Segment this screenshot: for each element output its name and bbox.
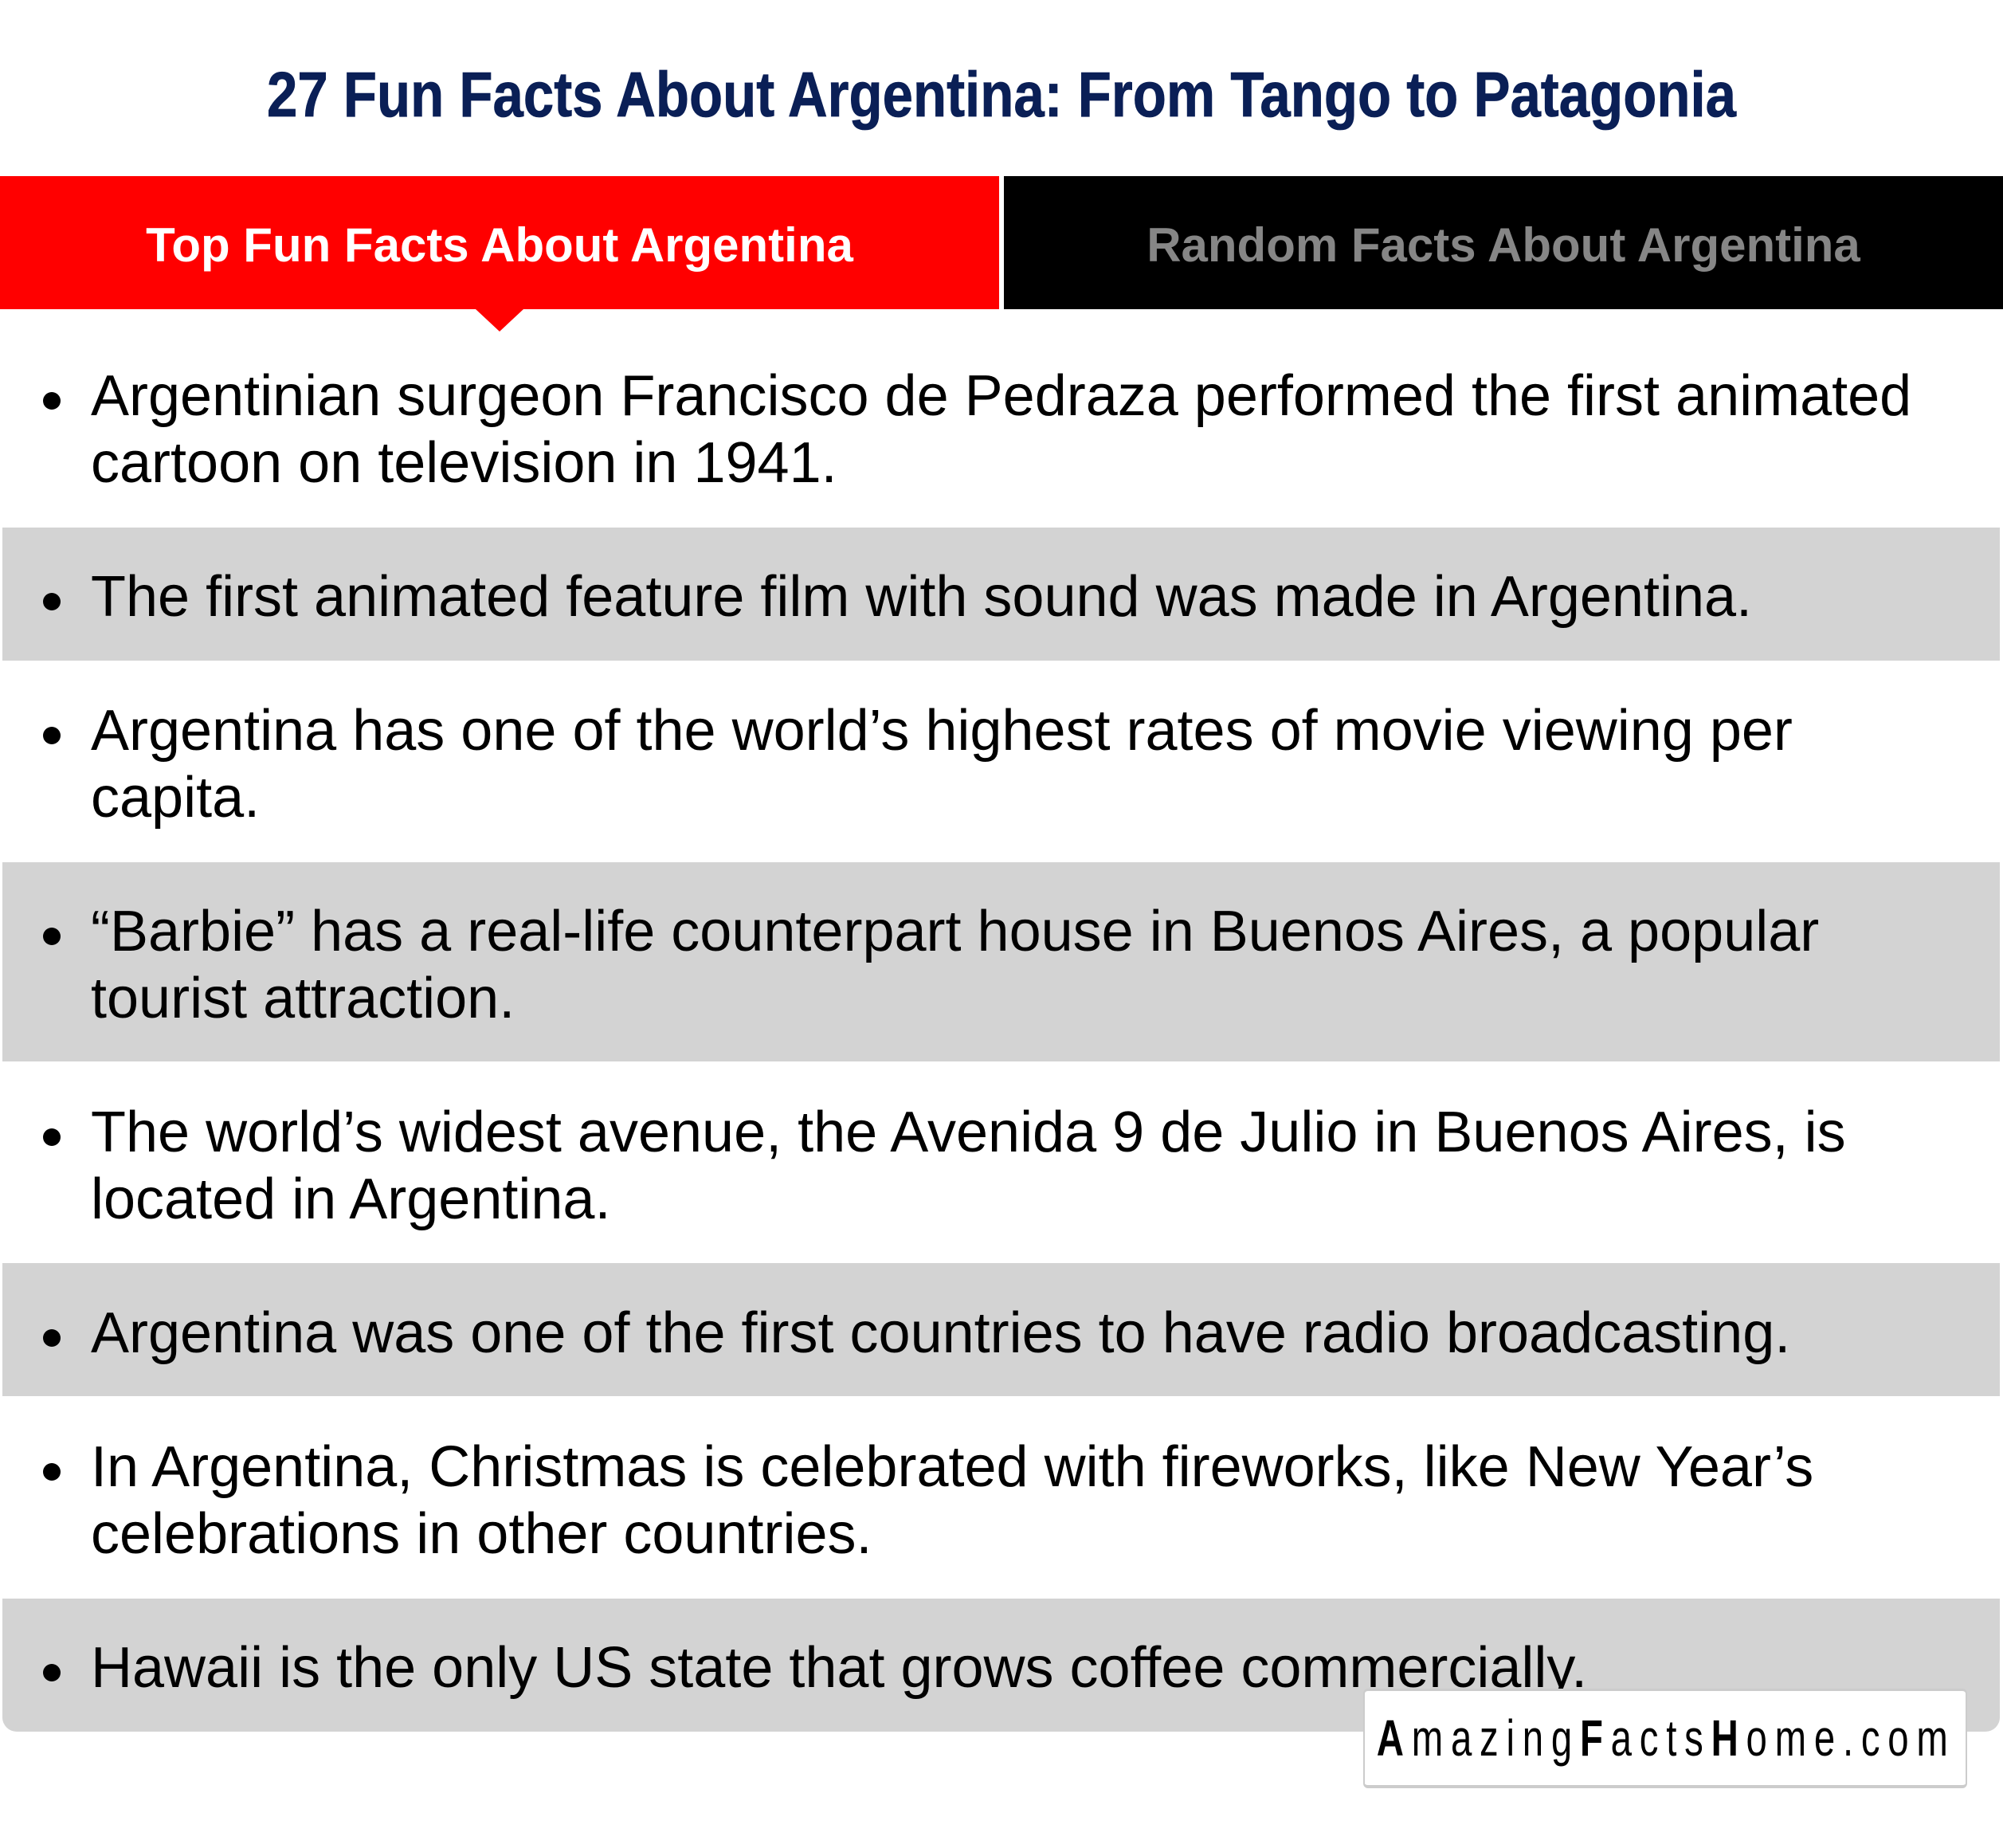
row background 2: [2, 528, 2000, 661]
fact 3: Argentina has one of the world’s highest rates of movie viewing per: [91, 699, 1793, 763]
fact 4: tourist attraction.: [91, 967, 515, 1030]
fact 7: celebrations in other countries.: [91, 1502, 872, 1566]
tab: random facts (inactive): Random Facts About Argentina: [1147, 218, 1860, 272]
fact 7: [43, 1435, 1813, 1566]
fact 2: The first animated feature film with sound was made in Argentina.: [91, 565, 1752, 629]
fact 1: [43, 364, 1911, 495]
fact 1: Argentinian surgeon Francisco de Pedraza performed the first animated: [91, 364, 1911, 428]
watermark text: AmazingFactsHome.com: [1377, 1709, 1948, 1767]
tab: random facts (inactive): [1004, 176, 2003, 309]
row background 4: [2, 862, 2000, 1061]
tab pointer arrow: [476, 309, 523, 332]
fact 4: “Barbie” has a real-life counterpart house in Buenos Aires, a popular: [91, 900, 1819, 963]
fact 5: The world’s widest avenue, the Avenida 9 de Julio in Buenos Aires, is: [91, 1101, 1846, 1164]
tab: top fun facts (active): Top Fun Facts About Argentina: [146, 218, 853, 272]
tab: top fun facts (active): [0, 176, 999, 309]
fact 5: located in Argentina.: [91, 1167, 610, 1231]
fact 3: [43, 699, 1793, 830]
fact 4: [43, 900, 1819, 1030]
fact 1: cartoon on television in 1941.: [91, 431, 837, 495]
fact 5: [43, 1101, 1846, 1231]
fact 8: Hawaii is the only US state that grows coffee commercially.: [91, 1636, 1587, 1700]
fact 6: Argentina was one of the first countries to have radio broadcasting.: [91, 1301, 1790, 1365]
row background 8: [2, 1599, 2000, 1732]
watermark badge: [1363, 1689, 1967, 1788]
fact 3: capita.: [91, 766, 260, 830]
fact 7: In Argentina, Christmas is celebrated with fireworks, like New Year’s: [91, 1435, 1813, 1499]
title: 27 Fun Facts About Argentina: From Tango to Patagonia: [267, 59, 1736, 130]
row background 6: [2, 1263, 2000, 1396]
